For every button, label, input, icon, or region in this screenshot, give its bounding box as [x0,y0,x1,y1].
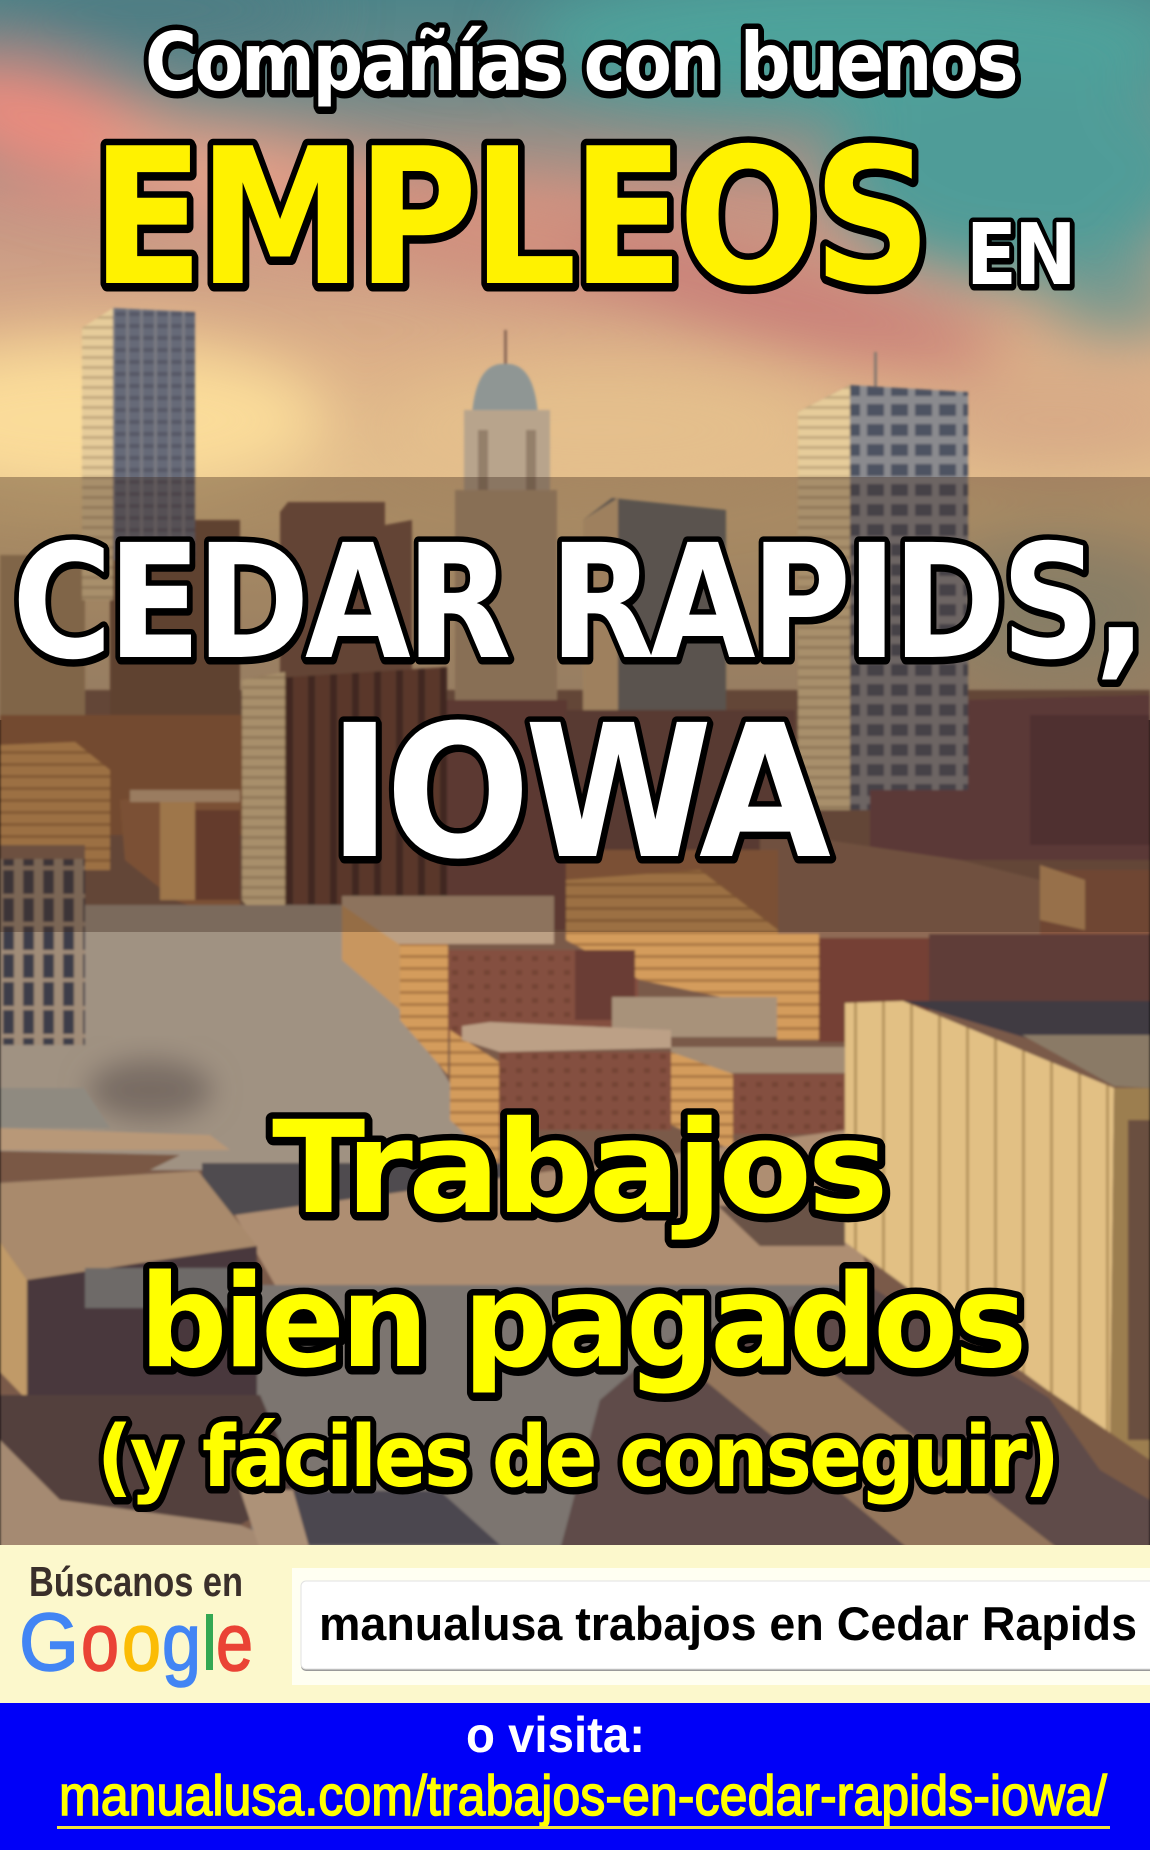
mid-city base [0,690,1150,1550]
center left building [242,667,447,925]
search query text: manualusa trabajos en Cedar Rapids [319,1597,1137,1650]
road shadow [88,1060,212,1120]
teal building [583,498,726,730]
tower left [82,308,195,600]
icon: Google logo: g [162,1597,201,1688]
panel: visit footer [0,1703,1150,1850]
icon: Google logo: G [19,1597,79,1688]
background: city skyline [0,308,1150,1550]
icon: Google logo: e [216,1597,253,1688]
lower right road [560,1285,1150,1550]
right low mass [870,695,1150,860]
heading: EN: EN [966,206,1074,305]
far left buildings [0,555,85,725]
search box [301,1581,1150,1671]
subheading: y fáciles de conseguir: (y fáciles de conseguir) [97,1408,1057,1507]
upper road [0,905,470,1170]
icon: Google logo [19,1597,253,1688]
left brown rooftops [0,715,242,925]
icon: Google logo: o [81,1597,119,1688]
central block [342,850,778,1075]
right rooftops [760,830,1040,940]
central road [250,1285,900,1550]
upper right brick [777,934,1150,1042]
label: Búscanos en: Búscanos en [29,1558,243,1605]
big right building [845,1001,1150,1460]
heading: bien pagados: bien pagados [139,1248,1023,1397]
icon: Google logo: o [122,1597,161,1688]
left grey lot [0,1088,110,1128]
translucent band [0,477,1150,932]
background: sunset sky [0,0,1150,720]
sand middle ground [235,1130,868,1285]
text: o visita: o visita: [466,1707,645,1763]
left striped building [0,845,85,1045]
heading: Trabajos: Trabajos [272,1094,884,1243]
left roof building [0,1171,257,1400]
panel: Google search strip [0,1545,1150,1703]
heading: Compañías con buenos: Compañías con buenos [145,16,1016,109]
right tower [798,352,968,810]
dark stripes court [202,1163,502,1215]
heading: EMPLEOS: EMPLEOS [91,108,926,328]
heading: Iowa: IOWA [328,686,831,900]
mid buildings [450,1022,845,1165]
domed tower [455,330,557,705]
